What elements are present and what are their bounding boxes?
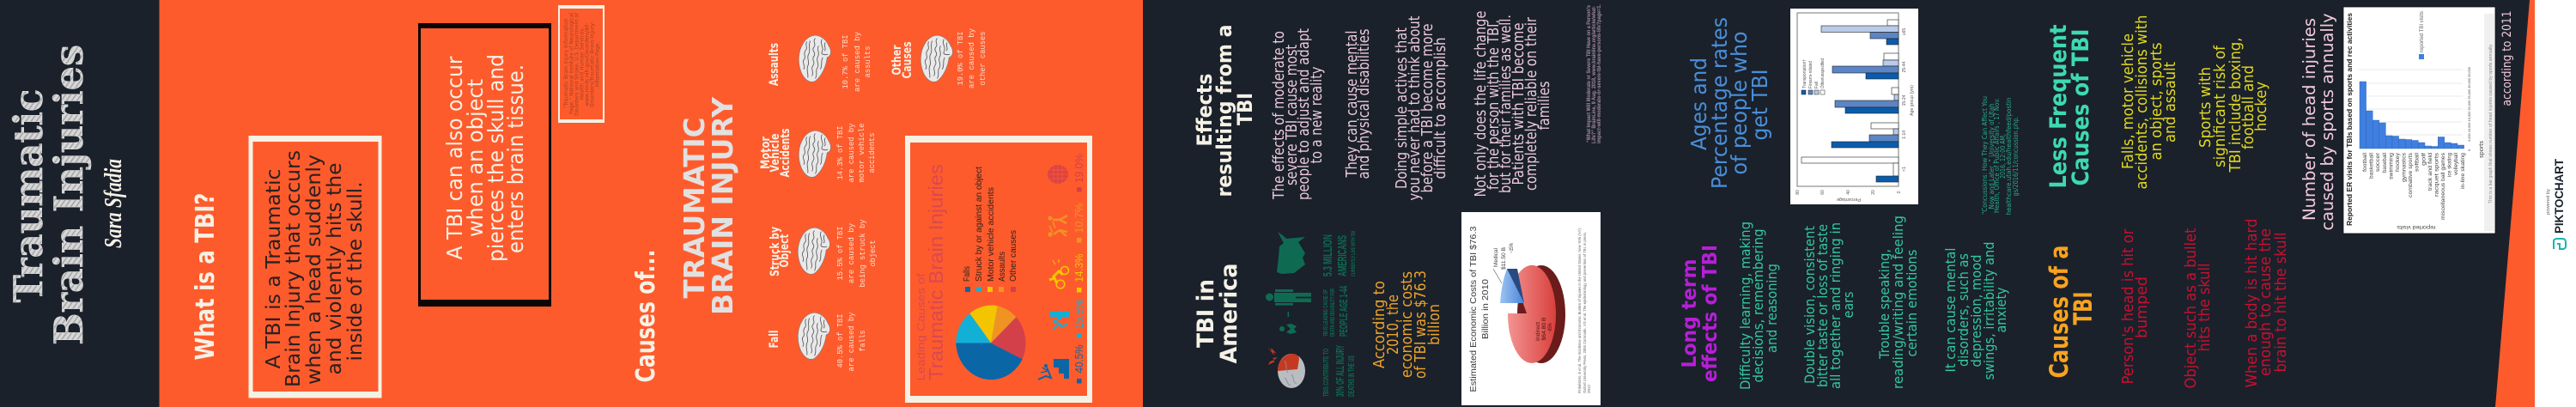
icon: struck by object (1050, 312, 1069, 330)
text: learning difficulty: decisions, remembering (1750, 228, 1766, 383)
citation box: Disorders and Stroke, U.S. Department of (574, 12, 580, 116)
stat: 5.3 million: AMERICANS (1335, 235, 1350, 276)
chart title: Leading Causes of (915, 273, 927, 381)
chart card: economic cost pie: $64.80 B (1542, 318, 1547, 340)
definition box: and violently hits the (322, 163, 346, 374)
chart card: economic cost pie: ~15% (1510, 242, 1515, 253)
stat: leading cause of death: PEOPLE AGE 1-44 (1337, 286, 1350, 337)
chart card: reported ER visits: miscellaneous ball games (2440, 152, 2446, 220)
icon: falling down stairs (1038, 359, 1069, 380)
chart card: reported ER visits: ice skating (2447, 153, 2452, 177)
chart card: reported ER visits: football (2362, 152, 2368, 172)
chart card: reported ER visits: gymnastics (2401, 152, 2408, 182)
citation: university of utah: gs/2016/11/concussion.php. (2012, 117, 2020, 196)
panel: leading causes chart (905, 136, 1092, 403)
text: falls and accidents: Falls, motor vehicle (2120, 33, 2137, 169)
chart card: reported ER visits: basketball (2368, 152, 2375, 179)
chart card: reported ER visits: This is a bar graph that shows number of head injuries caused by sports annually. (2488, 44, 2494, 204)
text: economic costs: economic costs (1399, 271, 1416, 378)
chart card: reported ER visits: combative sports (2408, 152, 2414, 197)
heading: traumatic brain injury (677, 96, 739, 315)
chart card: economic cost pie (1461, 212, 1601, 405)
icon: brain other causes (1048, 165, 1068, 184)
text: double vision (1801, 222, 1856, 389)
heading: effects (1193, 24, 1257, 197)
text: sports risk: TBI include boxing, (2227, 38, 2245, 173)
chart card: reported ER visits: volleyball (2453, 152, 2459, 175)
cause: struck by object: Object (778, 234, 792, 268)
text: head hit: Person's head is hit or (2120, 228, 2137, 385)
bar chart: TBI causes by age group: 80 (1795, 190, 1801, 195)
stat: 5.3 million: 5.3 MILLION (1321, 234, 1335, 276)
text: simple activities: difficult to accomplish (1432, 38, 1449, 179)
panel: what is a TBI (191, 5, 605, 398)
text: head hit (2120, 228, 2151, 385)
text: adjust to new reality: to a new reality (1309, 67, 1326, 163)
panel: causes of a TBI (2044, 218, 2290, 388)
cause: struck by object: 15.5% of TBI (836, 227, 845, 280)
cause: other causes: Other (890, 45, 904, 76)
penetrating injury box: when an object (463, 79, 488, 237)
heading: number of head injuries (2300, 13, 2337, 230)
title (5, 45, 92, 345)
citation box: Health and Human Services, (578, 27, 585, 100)
cause: struck by object: object (869, 240, 878, 266)
text: economic costs (1371, 270, 1443, 379)
bar chart: TBI causes by age group: Age group (yrs) (1910, 85, 1915, 116)
cause: other causes: are caused by (968, 27, 976, 88)
heading: ages: Percentage rates (1707, 17, 1732, 189)
stat: leading cause of death: TBI IS LEADING CAUSE OF (1323, 289, 1329, 337)
cause: fall: falls (859, 330, 867, 352)
logo: piktochart: powered by (2546, 189, 2551, 215)
chart card: economic cost pie: Estimated Economic Costs of TBI $76.3 (1468, 226, 1479, 392)
cause: assaults (768, 31, 872, 92)
chart card: reported ER visits: hockey (2395, 152, 2401, 172)
heading: number of head injuries: Number of head injuries (2300, 18, 2319, 221)
chart card: economic cost pie: Finkelstein, E et al. The Incidence and Economic Burden of Injuries in the United States. New York (NY): (1577, 228, 1582, 393)
text: falls and accidents: and assault (2162, 62, 2179, 143)
bar chart: TBI causes by age group: Firearm-related (1808, 61, 1814, 88)
author name: Sara Sfadia (100, 159, 127, 248)
text: falls and accidents (2120, 15, 2179, 189)
cause: struck by object: Struck by (769, 227, 782, 276)
text: adjust to new reality: severe TBI cause most (1284, 45, 1301, 185)
heading: TBI in America: America (1216, 263, 1242, 364)
chart card: economic cost pie: Billion in 2010 (1480, 279, 1491, 339)
percentages: 40.5% (1073, 345, 1085, 373)
text: double vision: Double vision, consistent (1801, 226, 1818, 384)
bar chart: TBI causes by age group: Fall (1814, 82, 1820, 88)
panel: less frequent causes (2045, 15, 2270, 189)
background: dark title band (0, 0, 160, 407)
bar chart: TBI causes by age group: 40 (1846, 190, 1851, 195)
text: trouble speaking: certain emotions (1904, 249, 1920, 357)
percentages: 19.0% (1073, 154, 1085, 183)
title: Traumatic (5, 89, 52, 302)
bar chart: TBI causes by age group: 1-14 (1902, 131, 1907, 139)
text: simple activities (1394, 15, 1449, 201)
heading: traumatic brain injury: BRAIN INJURY (706, 96, 739, 315)
chart card: economic cost pie: Medical (1494, 248, 1499, 267)
heading: number of head injuries: caused by sports annually (2318, 13, 2337, 230)
pie chart (956, 306, 1026, 380)
chart card: reported ER visits: 5,000 10,000 15,000 20,000 25,000 30,000 35,000 (2467, 66, 2471, 142)
title: Brain Injuries (46, 45, 92, 345)
icon: motor vehicle accident (1049, 259, 1068, 289)
heading: causes of a TBI: Causes of a (2044, 246, 2074, 378)
bar chart: TBI causes by age group: Other/unspecified (1820, 58, 1826, 88)
bar chart: TBI causes by age group (1790, 9, 1918, 204)
legend: Falls (962, 266, 972, 282)
text: trouble speaking: reading/writing and feeling (1890, 216, 1906, 389)
text: simple activities: Doing simple actives that (1394, 27, 1411, 189)
legend (962, 167, 1018, 292)
text: adjust to new reality: The effects of moderate to (1271, 31, 1288, 200)
icon: assault figures (1048, 216, 1067, 237)
text: economic costs: billion (1426, 304, 1443, 345)
text: life change: families (1536, 81, 1553, 131)
text: mental disorders: disorders, such as (1955, 253, 1971, 367)
text: learning difficulty: Difficulty learning, making (1737, 222, 1753, 390)
cause: other causes (890, 27, 987, 88)
cause: motor vehicle accidents: 14.3% of TBI (836, 125, 845, 180)
chart card: reported ER visits: golf (2421, 153, 2427, 166)
text: sports risk (2197, 38, 2270, 173)
penetrating injury box: A TBI can also occur (442, 56, 467, 259)
citation: university of utah: Now and Later .” University of Utah (1988, 103, 1996, 210)
citation box: www.ninds.nih.gov/Disorders/All- (584, 22, 591, 106)
bar chart: TBI causes by age group: ≥65 (1902, 28, 1907, 35)
text: sports risk: Sports with (2197, 67, 2215, 148)
citation: university of utah: “Concussions: How They Can Affect You (1981, 96, 1989, 215)
cause: motor vehicle accidents (759, 123, 877, 182)
penetrating injury box (418, 23, 551, 307)
text: mental disorders: anxiety (1993, 287, 2009, 333)
text: falls and accidents: accidents, collisions with (2134, 15, 2151, 189)
chart card: reported ER visits (2343, 7, 2495, 234)
heading: ages: Ages and (1686, 58, 1711, 150)
icon: US map (1277, 232, 1305, 274)
heading: TBI in America: TBI in (1193, 279, 1219, 348)
text: double vision: all together and ringing in (1827, 222, 1844, 389)
heading: less frequent causes: Causes of TBI (2068, 29, 2094, 185)
percentages: 15.5% (1073, 300, 1085, 329)
chart card: reported ER visits: track and field (2427, 153, 2433, 191)
chart card: reported ER visits: reported visits (2397, 224, 2435, 230)
percentages: 14.3% (1073, 254, 1085, 282)
background: orange diagonal footer wedge (2495, 0, 2535, 407)
text: body hit (2244, 218, 2290, 388)
heading: causes of: Causes of... (631, 249, 661, 383)
text: object pierces: Object such as a bullet (2183, 228, 2200, 388)
text: mental disorders: It can cause mental (1942, 247, 1959, 373)
chart card: economic cost pie: ~85% (1548, 323, 1553, 333)
cause: struck by object: being struck by (859, 219, 867, 287)
background: orange panel (160, 0, 1143, 407)
chart card: economic cost pie: Oxford University Press, 2006 Coronado, VG et al. The epidemiology and prevention of TBI, in press, (1583, 232, 1587, 393)
text: mental disorders (1942, 242, 2009, 380)
chart title (915, 164, 947, 381)
text: object pierces: hits the skull (2196, 263, 2214, 352)
background: white footer (2535, 0, 2576, 407)
chart card: reported ER visits: sports (2477, 141, 2485, 158)
panel: sports head injuries (2300, 7, 2514, 234)
cause: fall: Fall (768, 330, 781, 349)
bar chart: TBI causes by age group: Percentage (1837, 197, 1861, 202)
heading: long term effects: effects of TBI (1699, 245, 1722, 382)
text: adjust to new reality (1271, 28, 1326, 200)
text: sports risk: hockey (2253, 82, 2270, 131)
text: learning difficulty: and reasoning (1764, 264, 1780, 353)
heading: TBI in America (1193, 263, 1242, 364)
stat: 30 percent of injury deaths: TBIS CONTRIBUTE TO (1322, 349, 1330, 397)
cause: motor vehicle accidents: Accidents (779, 129, 793, 177)
bar chart: TBI causes by age group: 15-24 (1902, 94, 1907, 106)
chart card: economic cost pie: 2012 (1587, 384, 1591, 393)
cause: motor vehicle accidents: Vehicle (769, 134, 782, 172)
panel: TBI in America (1193, 212, 1601, 405)
stat: 5.3 million (1321, 231, 1357, 276)
definition box: when a head suddenly (301, 155, 325, 385)
heading: causes of a TBI: TBI (2069, 292, 2098, 325)
cause: motor vehicle accidents: motor vehicle (858, 124, 866, 182)
text: economic costs: 2010, the (1385, 295, 1402, 355)
stat: 5.3 million: CURRENTLY LIVE WITH TBI (1352, 231, 1357, 276)
heading: less frequent causes (2045, 24, 2094, 189)
legend: Other causes (1008, 230, 1018, 282)
citation: university of utah (1981, 96, 2020, 215)
text: life change (1473, 10, 1553, 197)
text: sports risk: significant risk of (2212, 45, 2229, 167)
heading: effects: Effects (1193, 74, 1217, 146)
citation: brainline (1586, 4, 1602, 143)
cause: other causes: other causes (979, 31, 987, 86)
heading: long term effects: Long term (1679, 259, 1701, 368)
text: according to 2011: according to 2011 (2500, 10, 2514, 106)
text: mental disorders: swings, irritability and (1981, 242, 1997, 380)
text: mental disorders: depression, mood (1968, 254, 1984, 368)
text: learning difficulty (1737, 222, 1780, 390)
cause: assaults: assults (864, 46, 872, 77)
text: mental and physical disabilities (1344, 29, 1373, 179)
citation box: “Traumatic Brain Injury Information (562, 19, 569, 108)
penetrating injury box: enters brain tissue. (503, 64, 528, 253)
text: sports risk: football and (2240, 65, 2257, 149)
text: double vision: ears (1840, 292, 1856, 318)
heading: effects: resulting from a (1212, 24, 1236, 197)
cause: assaults: 10.7% of TBI (841, 34, 850, 89)
cause: fall (768, 312, 867, 371)
penetrating injury box: pierces the skull and (483, 54, 508, 262)
panel: TBI in America: 30% OF ALL INJURY (1334, 345, 1346, 397)
panel: ages and percentage rates (1686, 9, 1918, 204)
cause: assaults: are caused by (854, 31, 862, 92)
bar chart: TBI causes by age group: 0 (1897, 191, 1902, 193)
percentages (1073, 154, 1085, 383)
stat: leading cause of death: DEATH AND DISABILITY FOR (1330, 289, 1336, 337)
logo: piktochart: PIKTOCHART (2553, 158, 2566, 234)
cause: other causes: Causes (901, 41, 914, 79)
definition box: inside of the skull. (343, 182, 367, 361)
heading: ages (1686, 17, 1772, 189)
legend: Struck by or against an object (974, 167, 984, 282)
chart card: reported ER visits: swimming (2389, 153, 2394, 179)
text: trouble speaking (1876, 216, 1920, 389)
bar chart: TBI causes by age group: 20 (1871, 190, 1876, 195)
cause: struck by object: are caused by (848, 222, 856, 283)
heading: less frequent causes: Less Frequent (2045, 24, 2072, 189)
text: mental and physical disabilities: They can cause mental (1344, 31, 1361, 178)
icon: baby and adult (1266, 289, 1311, 334)
cause: fall: 40.5% of TBI (836, 314, 845, 368)
panel: effects resulting from a TBI (1193, 4, 1602, 201)
chart card: reported ER visits: softball (2415, 152, 2420, 172)
chart title: Traumatic Brain Injuries (925, 164, 947, 380)
citation box: Information-Page. (593, 41, 600, 88)
text: economic costs: According to (1371, 281, 1388, 368)
stat: leading cause of death (1323, 286, 1350, 337)
logo: piktochart (2546, 158, 2566, 249)
citation box: Page.” National Institute of Neurological (568, 13, 575, 114)
text: economic costs: of TBI was $76.3 (1413, 270, 1430, 379)
legend: Motor vehicle accidents (986, 187, 996, 282)
heading: what is a TBI: What is a TBI? (191, 192, 221, 361)
heading: long term effects (1679, 245, 1722, 382)
text: trouble speaking: Trouble speaking, (1876, 249, 1893, 360)
text: double vision: bitter taste or loss of taste (1814, 224, 1831, 387)
definition box (249, 136, 381, 398)
chart card: reported ER visits: baseball (2382, 152, 2388, 173)
citation box: Disorders/Traumatic-Brain-Injury- (589, 21, 596, 107)
text: body hit: When a body is hit hard (2244, 218, 2261, 388)
stat: 30 percent of injury deaths (1322, 345, 1357, 397)
citation box (558, 5, 605, 123)
chart card: economic cost pie: Indirect (1536, 322, 1541, 341)
text: object pierces (2183, 228, 2214, 388)
definition box: A TBI is a Traumatic (261, 168, 285, 369)
percentages: 10.7% (1073, 203, 1085, 234)
heading: ages: of people who (1727, 31, 1752, 175)
cause: motor vehicle accidents: Motor (759, 137, 773, 169)
text: falls and accidents: an object, sports (2148, 43, 2166, 160)
heading: causes of a TBI (2044, 246, 2098, 378)
text: adjust to new reality: people to adjust and adapt (1296, 28, 1313, 200)
chart card: reported ER visits: in-line skating (2460, 153, 2466, 189)
bar chart: TBI causes by age group: 60 (1820, 190, 1826, 195)
chart card: reported ER visits: racquet sports (2433, 152, 2440, 197)
cause: motor vehicle accidents: accidents (868, 132, 877, 173)
definition box: Brain Injury that occurs (281, 150, 305, 387)
heading: traumatic brain injury: TRAUMATIC (677, 117, 711, 299)
heading: effects: TBI (1233, 93, 1257, 125)
text: simple activities: before a TBI become more (1419, 24, 1437, 192)
panel: long term effects (1679, 96, 2020, 390)
stat: 30 percent of injury deaths: DEATHS IN THE US (1347, 355, 1357, 397)
panel: causes of traumatic brain injury (631, 27, 1092, 403)
cause: struck by object (769, 219, 878, 287)
chart card: reported ER visits: 0 (2467, 149, 2471, 151)
bar chart: TBI causes by age group: Transportation† (1802, 59, 1807, 88)
cause: motor vehicle accidents: are caused by (848, 123, 856, 182)
cause: other causes: 19.0% of TBI (957, 31, 965, 86)
text: body hit: brain to hit the skull (2273, 232, 2290, 373)
legend: Assaults (997, 252, 1007, 282)
text: life change: Patients with TBI become (1510, 22, 1528, 185)
text: mental and physical disabilities: and physical disabilities (1356, 29, 1373, 179)
heading: ages: get TBI (1747, 69, 1772, 141)
text: head hit: bumped (2134, 276, 2151, 338)
bar chart: TBI causes by age group: <1 (1902, 167, 1907, 172)
chart card: reported ER visits: reported TBI visits (2420, 11, 2425, 52)
cause: fall: are caused by (848, 312, 856, 371)
chart card: reported ER visits: soccer (2375, 152, 2381, 172)
citation: university of utah: healthcare.utah.edu/healthfeed/postin (2005, 97, 2013, 215)
citation: university of utah: 2016, 12:00 AM, (1999, 134, 2007, 179)
citation: university of utah: Health, Office of Public Affairs , 17 Nov. (1993, 98, 2001, 213)
chart card: reported ER visits: Reported ER visits for TBIs based on sports and rec activities (2345, 13, 2354, 226)
bar chart: TBI causes by age group: 25-44 (1902, 61, 1907, 72)
chart card: economic cost pie: $11.50 B (1502, 247, 1507, 270)
text: body hit: enough to cause the (2257, 228, 2275, 376)
icon: injured brain (1267, 347, 1305, 388)
cause: assaults: Assaults (768, 43, 781, 86)
background: dark content panel (1143, 0, 2538, 407)
